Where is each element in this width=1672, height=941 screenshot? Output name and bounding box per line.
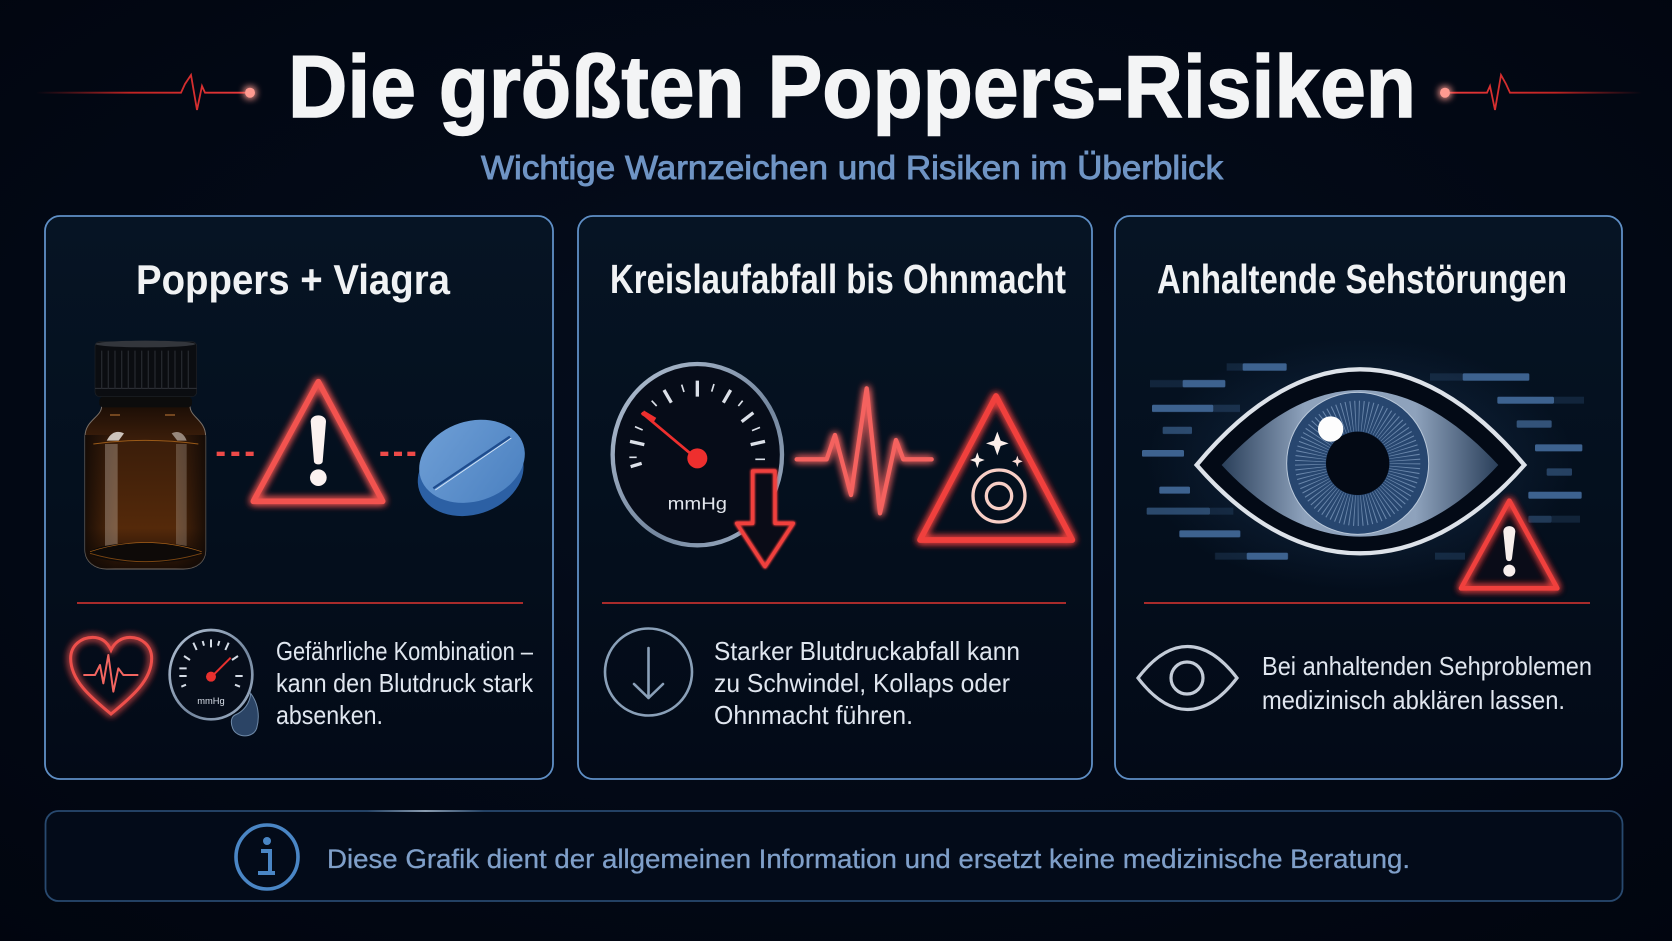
- text: description: Gefährliche Kombination –: [276, 636, 533, 666]
- subtitle: Wichtige Warnzeichen und Risiken im Überblick: [481, 149, 1224, 186]
- panel: Anhaltende Sehstörungen: [1115, 216, 1622, 779]
- text: description: Ohnmacht führen.: [714, 700, 913, 730]
- heading: Kreislaufabfall bis Ohnmacht: Kreislaufabfall bis Ohnmacht: [610, 256, 1066, 302]
- icon: small pressure gauge: mmHg: [197, 696, 225, 706]
- heading: Poppers + Viagra: Poppers + Viagra: [136, 256, 451, 303]
- illustration: large eye: [1142, 338, 1584, 592]
- icon: small pressure gauge: [170, 630, 258, 736]
- text: description: kann den Blutdruck stark: [276, 668, 534, 698]
- arrow: pressure falling: [737, 471, 793, 567]
- decoration: left heartbeat line: [36, 75, 255, 110]
- text: disclaimer: Diese Grafik dient der allgemeinen Information und ersetzt keine medizinische Beratung.: [327, 844, 1410, 874]
- decoration: right heartbeat line: [1440, 75, 1642, 110]
- text: description: Bei anhaltenden Sehproblemen: [1262, 651, 1592, 681]
- panel: disclaimer footer: [46, 810, 1622, 901]
- icon: warning triangle: [1461, 501, 1557, 588]
- blurred vision streaks: [1142, 363, 1584, 560]
- text: description: zu Schwindel, Kollaps oder: [714, 668, 1010, 698]
- panel: Poppers + Viagra: [45, 216, 553, 779]
- icon: brown bottle: [85, 341, 206, 569]
- panel: Kreislaufabfall bis Ohnmacht: [578, 216, 1092, 779]
- chart line: heartbeat: [797, 388, 932, 513]
- icon: information: [236, 825, 298, 889]
- icon: warning triangle: [253, 382, 383, 501]
- icon: heart with pulse: [71, 637, 152, 714]
- icon: large pressure gauge: mmHg: [668, 493, 727, 513]
- icon: outline eye: [1138, 646, 1237, 710]
- divider: [77, 602, 523, 604]
- divider: [1144, 602, 1590, 604]
- icon: blue pill: [407, 407, 536, 529]
- text: description: medizinisch abklären lassen.: [1262, 685, 1565, 715]
- title: Die größten Poppers-Risiken: [288, 37, 1416, 136]
- text: description: absenken.: [276, 700, 383, 730]
- text: description: [1262, 651, 1592, 715]
- divider: [602, 602, 1066, 604]
- icon: circle with down arrow: [605, 628, 692, 716]
- icon: warning triangle with dizziness: [920, 396, 1072, 540]
- icon: large pressure gauge: [613, 364, 782, 545]
- text: description: [276, 636, 534, 730]
- icon: dashed connectors: [217, 452, 415, 456]
- heading: Anhaltende Sehstörungen: Anhaltende Sehstörungen: [1157, 256, 1567, 302]
- text: description: Starker Blutdruckabfall kann: [714, 636, 1020, 666]
- text: description: [714, 636, 1020, 730]
